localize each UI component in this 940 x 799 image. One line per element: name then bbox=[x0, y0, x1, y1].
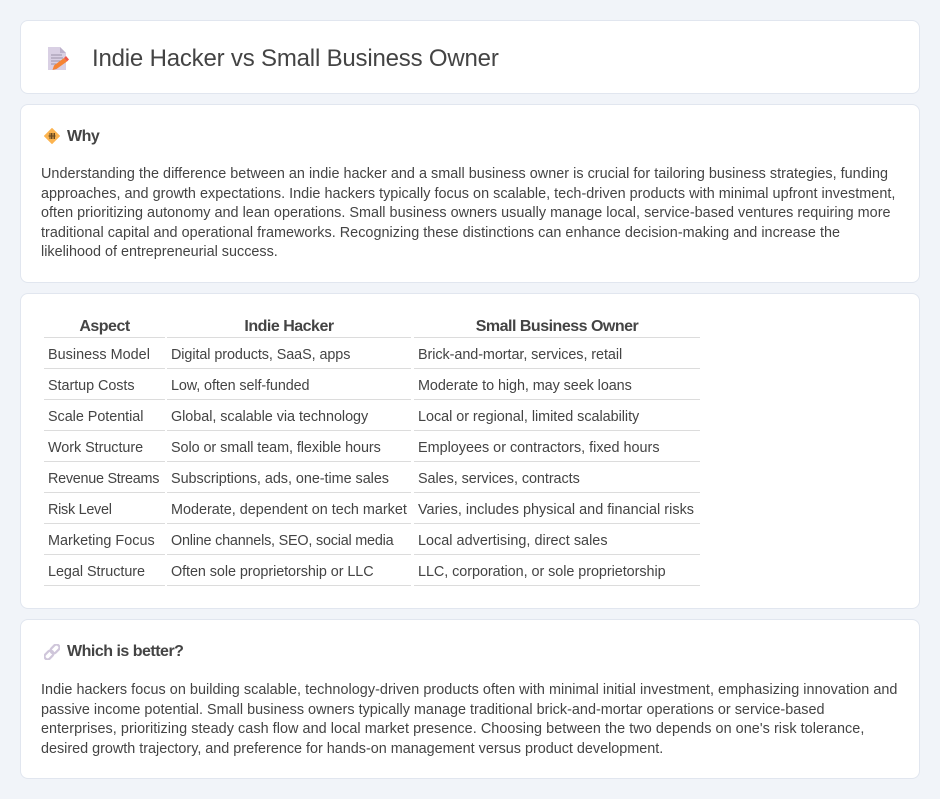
icon: document with pencil bbox=[48, 47, 69, 70]
row: legal structure bbox=[48, 564, 666, 580]
row: revenue streams: Revenue Streams bbox=[48, 471, 159, 487]
row: scale potential: Local or regional, limited scalability bbox=[418, 409, 639, 425]
row: risk level: Moderate, dependent on tech market bbox=[171, 502, 407, 518]
text block: verdict: Indie hackers focus on building scalable, technology-driven products often with minimal initial investment, emphasizing innovation and bbox=[41, 682, 897, 698]
row: business model: Business Model bbox=[48, 347, 150, 363]
heading: page title: Indie Hacker vs Small Business Owner bbox=[92, 45, 499, 72]
row: scale potential bbox=[48, 409, 640, 425]
row: revenue streams: Subscriptions, ads, one-time sales bbox=[171, 471, 389, 487]
text block: verdict: desired growth trajectory, and preference for hands-on management versus product development. bbox=[41, 741, 663, 757]
heading: which is better: Which is better? bbox=[67, 643, 183, 660]
row: revenue streams bbox=[48, 471, 580, 487]
row: marketing focus: Online channels, SEO, social media bbox=[171, 533, 393, 549]
panel: comparison table bbox=[20, 293, 920, 609]
column headers bbox=[79, 318, 638, 335]
row: risk level: Varies, includes physical and financial risks bbox=[418, 502, 694, 518]
row: risk level bbox=[48, 502, 694, 518]
row: work structure: Work Structure bbox=[48, 440, 143, 456]
row: business model bbox=[48, 347, 622, 363]
row: startup costs: Low, often self-funded bbox=[171, 378, 309, 394]
text block: why explanation: likelihood of entrepreneurial success. bbox=[41, 244, 278, 260]
icon: chain link bbox=[44, 644, 60, 660]
text block: why explanation: approaches, and growth expectations. Indie hackers typically focus on scalable, tech-driven products with minimal upfront investment, bbox=[41, 186, 895, 202]
panel: title bbox=[20, 20, 920, 94]
text block: why explanation bbox=[41, 166, 895, 260]
row: business model: Digital products, SaaS, apps bbox=[171, 347, 350, 363]
text block: why explanation: Understanding the difference between an indie hacker and a small business owner is crucial for tailoring business strategies, funding bbox=[41, 166, 888, 182]
panel: which is better bbox=[20, 619, 920, 779]
row: marketing focus bbox=[48, 533, 608, 549]
row: marketing focus: Marketing Focus bbox=[48, 533, 155, 549]
row: legal structure: LLC, corporation, or sole proprietorship bbox=[418, 564, 666, 580]
row: scale potential: Global, scalable via technology bbox=[171, 409, 368, 425]
icon: warning diamond bbox=[44, 128, 60, 144]
row: work structure: Employees or contractors, fixed hours bbox=[418, 440, 660, 456]
heading: why: Why bbox=[67, 128, 99, 145]
row: startup costs bbox=[48, 378, 632, 394]
column headers: Small Business Owner bbox=[476, 318, 638, 335]
text block: verdict: passive income potential. Small business owners typically manage traditional brick-and-mortar operations or service-based bbox=[41, 702, 825, 718]
row: work structure bbox=[48, 440, 660, 456]
table: comparison bbox=[44, 318, 700, 586]
text block: verdict bbox=[41, 682, 897, 757]
text block: why explanation: often prioritizing autonomy and lean operations. Small business owners usually manage local, service-based ventures requiring more bbox=[41, 205, 891, 221]
row: revenue streams: Sales, services, contracts bbox=[418, 471, 580, 487]
row: legal structure: Often sole proprietorship or LLC bbox=[171, 564, 374, 580]
column headers: Aspect bbox=[79, 318, 130, 335]
row: work structure: Solo or small team, flexible hours bbox=[171, 440, 381, 456]
text block: why explanation: traditional capital and operational frameworks. Recognizing these distinctions can enhance decision-making and increase the bbox=[41, 225, 840, 241]
row: legal structure: Legal Structure bbox=[48, 564, 145, 580]
row: scale potential: Scale Potential bbox=[48, 409, 143, 425]
row: startup costs: Startup Costs bbox=[48, 378, 135, 394]
text block: verdict: enterprises, prioritizing steady cash flow and local market presence. Choosing between the two depends on one's risk tolerance, bbox=[41, 721, 864, 737]
row: business model: Brick-and-mortar, services, retail bbox=[418, 347, 622, 363]
panel: why bbox=[20, 104, 920, 283]
row: marketing focus: Local advertising, direct sales bbox=[418, 533, 608, 549]
row: startup costs: Moderate to high, may seek loans bbox=[418, 378, 632, 394]
row: risk level: Risk Level bbox=[48, 502, 112, 518]
column headers: Indie Hacker bbox=[244, 318, 334, 335]
